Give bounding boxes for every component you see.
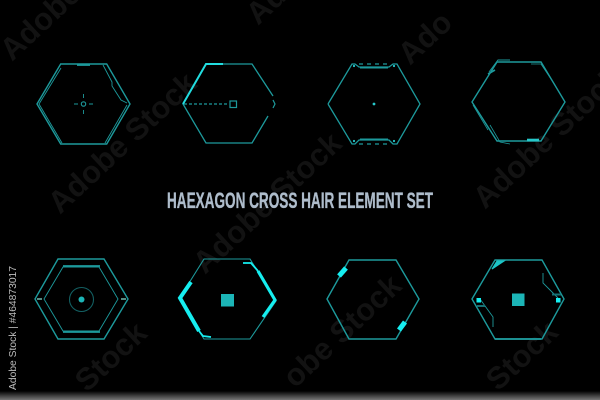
watermarks: Stock	[479, 313, 565, 397]
hexagon 2: dashed line and small square	[183, 64, 275, 143]
side credit: Adobe Stock | #464873017	[7, 266, 19, 390]
hexagon 7: two bright edge marks	[327, 260, 419, 339]
watermarks: Adobe Stock	[186, 125, 349, 280]
watermarks: obe Stock	[276, 267, 409, 394]
hexagon 4: offset corner accents	[472, 60, 565, 144]
hexagon 1: crosshair	[37, 64, 130, 144]
hexagon 6: bright side brackets and centre square	[179, 259, 276, 339]
title: HAEXAGON CROSS HAIR ELEMENT SET	[167, 188, 433, 213]
watermarks: Adobe Stock	[41, 65, 204, 220]
watermarks: Stock	[68, 314, 154, 398]
watermarks: Ado	[391, 4, 459, 71]
hexagon 3: notched top and bottom	[328, 64, 420, 144]
hexagon 8: circuit details and centre square	[472, 260, 564, 339]
hexagon 5: double frame with target	[35, 259, 128, 339]
bottom fade	[0, 391, 600, 400]
